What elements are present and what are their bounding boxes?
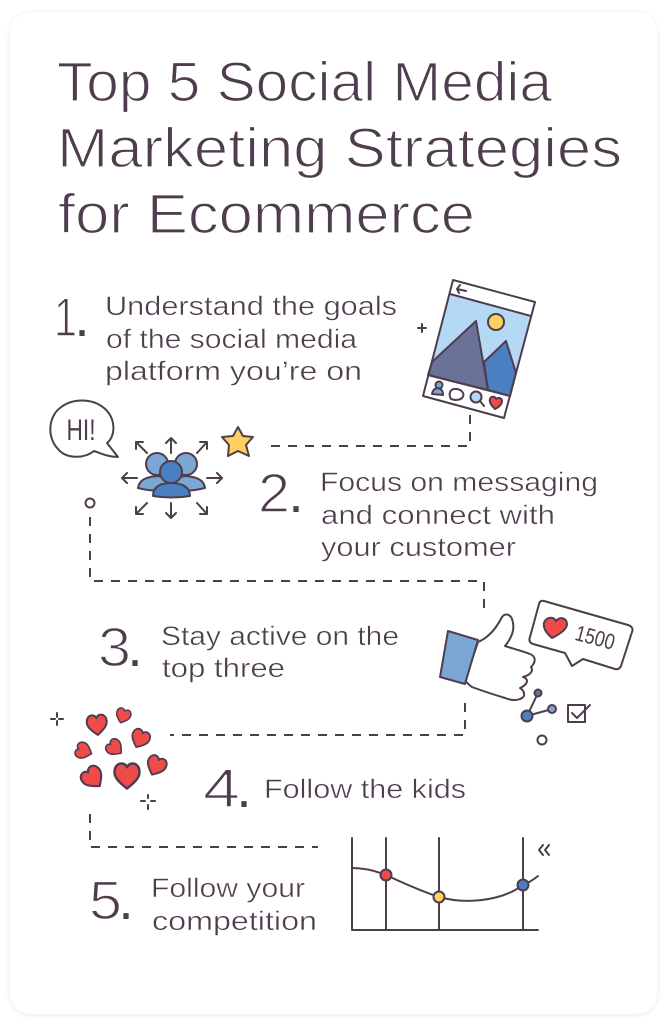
icon: double chevrons — [539, 845, 549, 855]
step 4 number — [203, 757, 252, 819]
step 2 text: Focus on messaging — [320, 467, 598, 497]
title: Marketing Strategies — [57, 116, 622, 179]
step 5 text — [151, 873, 317, 936]
step 3 number: . — [127, 616, 143, 678]
step 4 number: . — [236, 757, 252, 819]
icon: star — [222, 427, 253, 456]
step 4 text: Follow the kids — [264, 774, 466, 804]
front person — [153, 483, 190, 498]
step 5 number — [89, 869, 134, 931]
icon: small circle — [86, 498, 94, 508]
title — [57, 50, 622, 245]
dashed connector 2 to 3 — [90, 517, 484, 616]
step 2 number — [258, 462, 304, 524]
radiating arrows — [122, 438, 222, 518]
step 2 number: . — [288, 462, 304, 524]
step 2 text: your customer — [321, 532, 516, 562]
icon: sparkle — [51, 713, 63, 725]
step 5 number: 5 — [89, 869, 122, 931]
icon: hearts cluster — [74, 707, 169, 793]
step 3 number: 3 — [98, 616, 131, 678]
step 1 number: . — [74, 286, 90, 348]
step 3 text: top three — [162, 653, 285, 683]
icon: HI speech bubble — [50, 400, 118, 457]
step 5 number: . — [118, 869, 134, 931]
step 3 text — [161, 621, 399, 683]
step 3 text: Stay active on the — [161, 621, 399, 651]
dashed connector 1 to 2 — [270, 415, 470, 446]
icon: checkbox — [568, 705, 590, 722]
step 1 text: platform you’re on — [105, 356, 362, 386]
step 2 number: 2 — [258, 462, 290, 524]
step 5 text: competition — [152, 906, 317, 936]
icon: thumbs up — [440, 615, 535, 700]
icon: audience with arrows — [122, 438, 222, 518]
step 2 text: and connect with — [321, 500, 555, 530]
step 2 text — [320, 467, 598, 562]
icon: network nodes — [522, 690, 556, 722]
title: for Ecommerce — [58, 182, 475, 245]
step 5 text: Follow your — [151, 873, 305, 903]
icon: small circle — [538, 736, 546, 744]
icon: HI speech bubble: HI! — [66, 414, 96, 447]
icon: plus — [418, 324, 426, 332]
step 1 text: of the social media — [106, 324, 358, 354]
back people — [138, 476, 174, 491]
line chart — [352, 838, 538, 930]
icon: likes bubble 1500 — [529, 601, 632, 669]
step 3 number — [98, 616, 143, 678]
step 1 number: 1 — [54, 286, 77, 348]
dashed connector 3 to 4 — [170, 703, 465, 735]
step 4 number: 4 — [203, 757, 240, 819]
step 1 text — [105, 291, 397, 386]
icon: likes bubble 1500: 1500 — [573, 620, 618, 655]
icon: social media post on phone — [423, 280, 535, 418]
dashed connector 4 to 5 — [90, 814, 318, 847]
step 1 text: Understand the goals — [105, 291, 397, 321]
icon: sparkle — [141, 795, 155, 809]
title: Top 5 Social Media — [57, 50, 553, 113]
